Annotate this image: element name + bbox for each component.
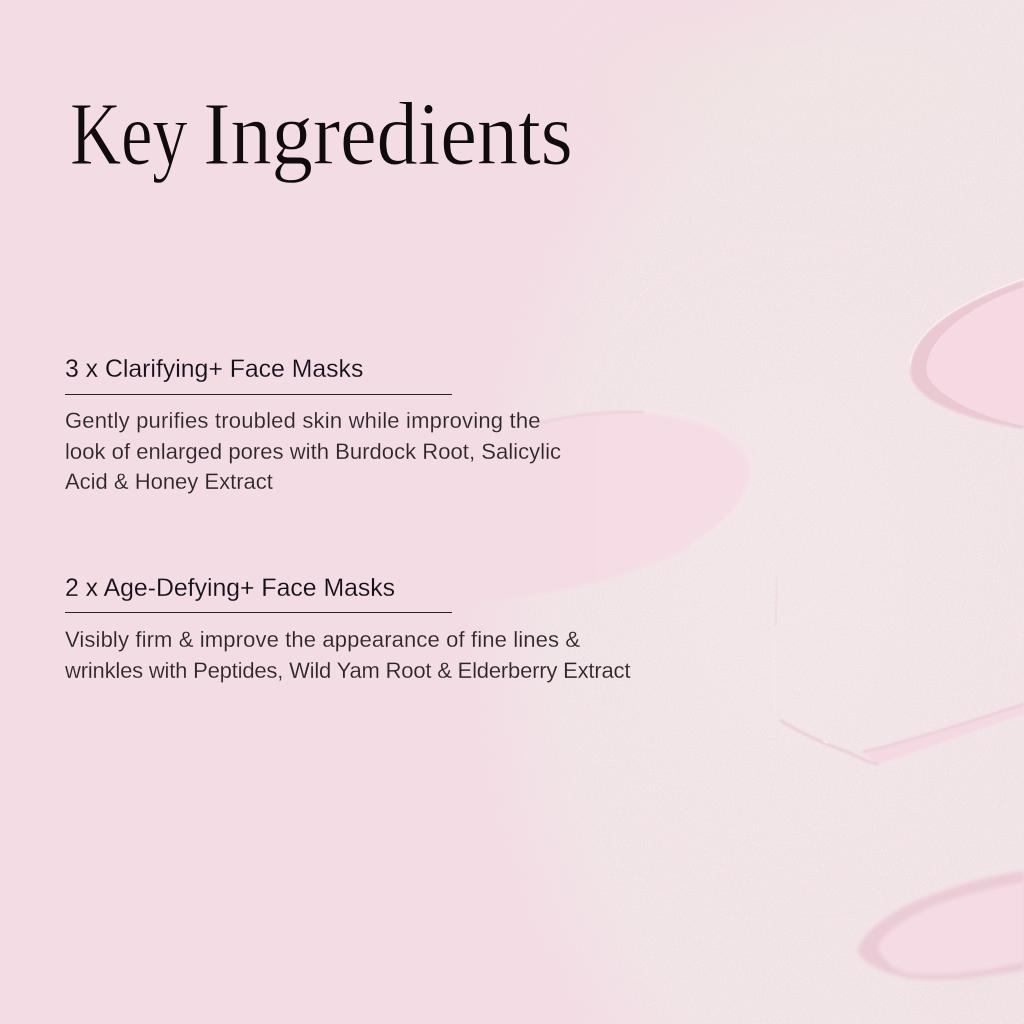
divider: Clarifying+ xyxy=(65,394,452,395)
description: Clarifying+: Acid & Honey Extract xyxy=(65,469,273,494)
title: Ingredients xyxy=(203,85,572,184)
title: Key xyxy=(70,85,187,184)
heading: Clarifying+: 3 x Clarifying+ Face Masks xyxy=(65,356,363,383)
description: Clarifying+: Gently purifies troubled skin while improving the xyxy=(65,408,541,433)
cutout: top right eye xyxy=(910,279,1024,429)
description: Clarifying+: look of enlarged pores with Burdock Root, Salicylic xyxy=(65,438,561,464)
heading: Age-Defying+: 2 x Age-Defying+ Face Masks xyxy=(65,575,395,602)
slit: nose fold xyxy=(773,575,1024,764)
cutout: centre eye xyxy=(430,411,753,601)
section: Age-Defying+ Face Masks xyxy=(65,575,630,682)
background: sheet mask photo xyxy=(506,0,1024,1024)
description: Age-Defying+: wrinkles with Peptides, Wild Yam Root & Elderberry Extract xyxy=(65,658,630,682)
description: Age-Defying+: Visibly firm & improve the appearance of fine lines & xyxy=(65,627,580,652)
divider: Age-Defying+ xyxy=(65,612,452,613)
description: Age-Defying+ xyxy=(65,627,630,682)
section: Clarifying+ Face Masks xyxy=(65,356,561,494)
cutout: bottom right lip xyxy=(858,871,1024,980)
description: Clarifying+ xyxy=(65,408,561,494)
